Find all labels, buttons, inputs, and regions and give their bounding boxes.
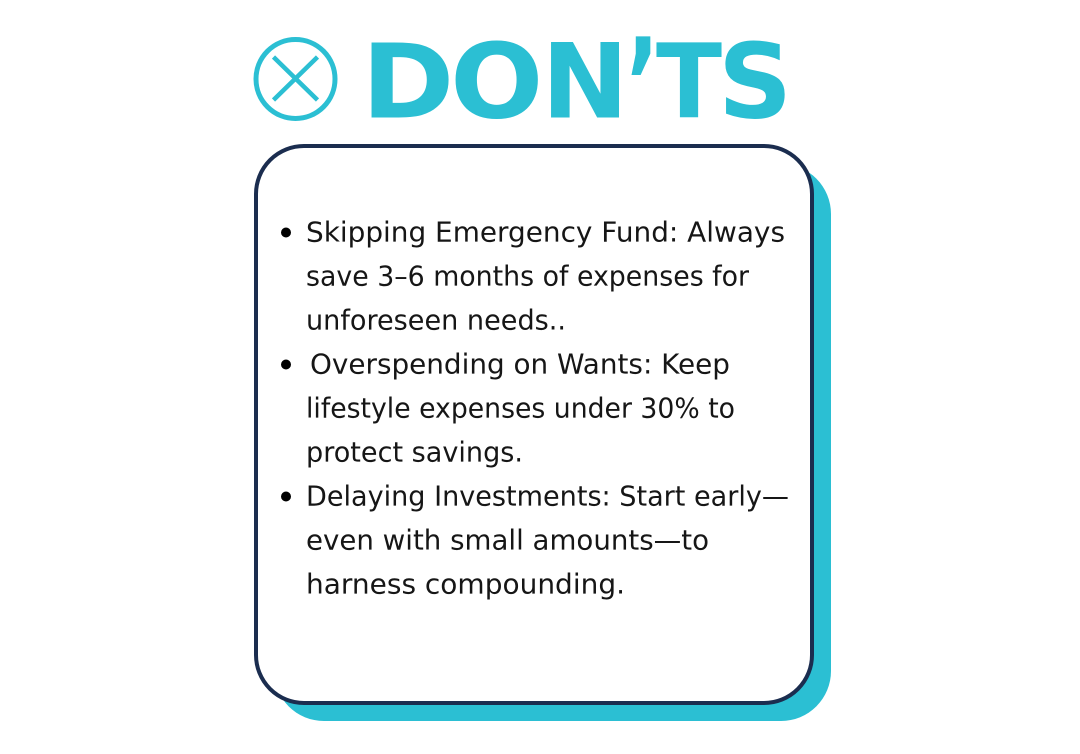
list text: unforeseen needs.. [306,304,566,336]
list text: Overspending on Wants: Keep [310,348,730,380]
list text: lifestyle expenses under 30% to [306,392,735,424]
icon: x in circle [254,37,338,121]
title: S [718,22,792,140]
list text: even with small amounts—to [306,524,709,556]
panel shadow [274,164,831,721]
list text: Skipping Emergency Fund: Always [306,216,785,248]
title: O [450,23,543,140]
list text: save 3–6 months of expenses for [306,260,750,292]
title: T [656,22,722,140]
list text: protect savings. [306,436,523,468]
title: N [542,23,629,140]
title [361,14,792,140]
list text: harness compounding. [306,568,625,600]
panel: don'ts list [254,144,814,705]
list text: Delaying Investments: Start early— [306,480,789,512]
title: D [361,23,454,140]
